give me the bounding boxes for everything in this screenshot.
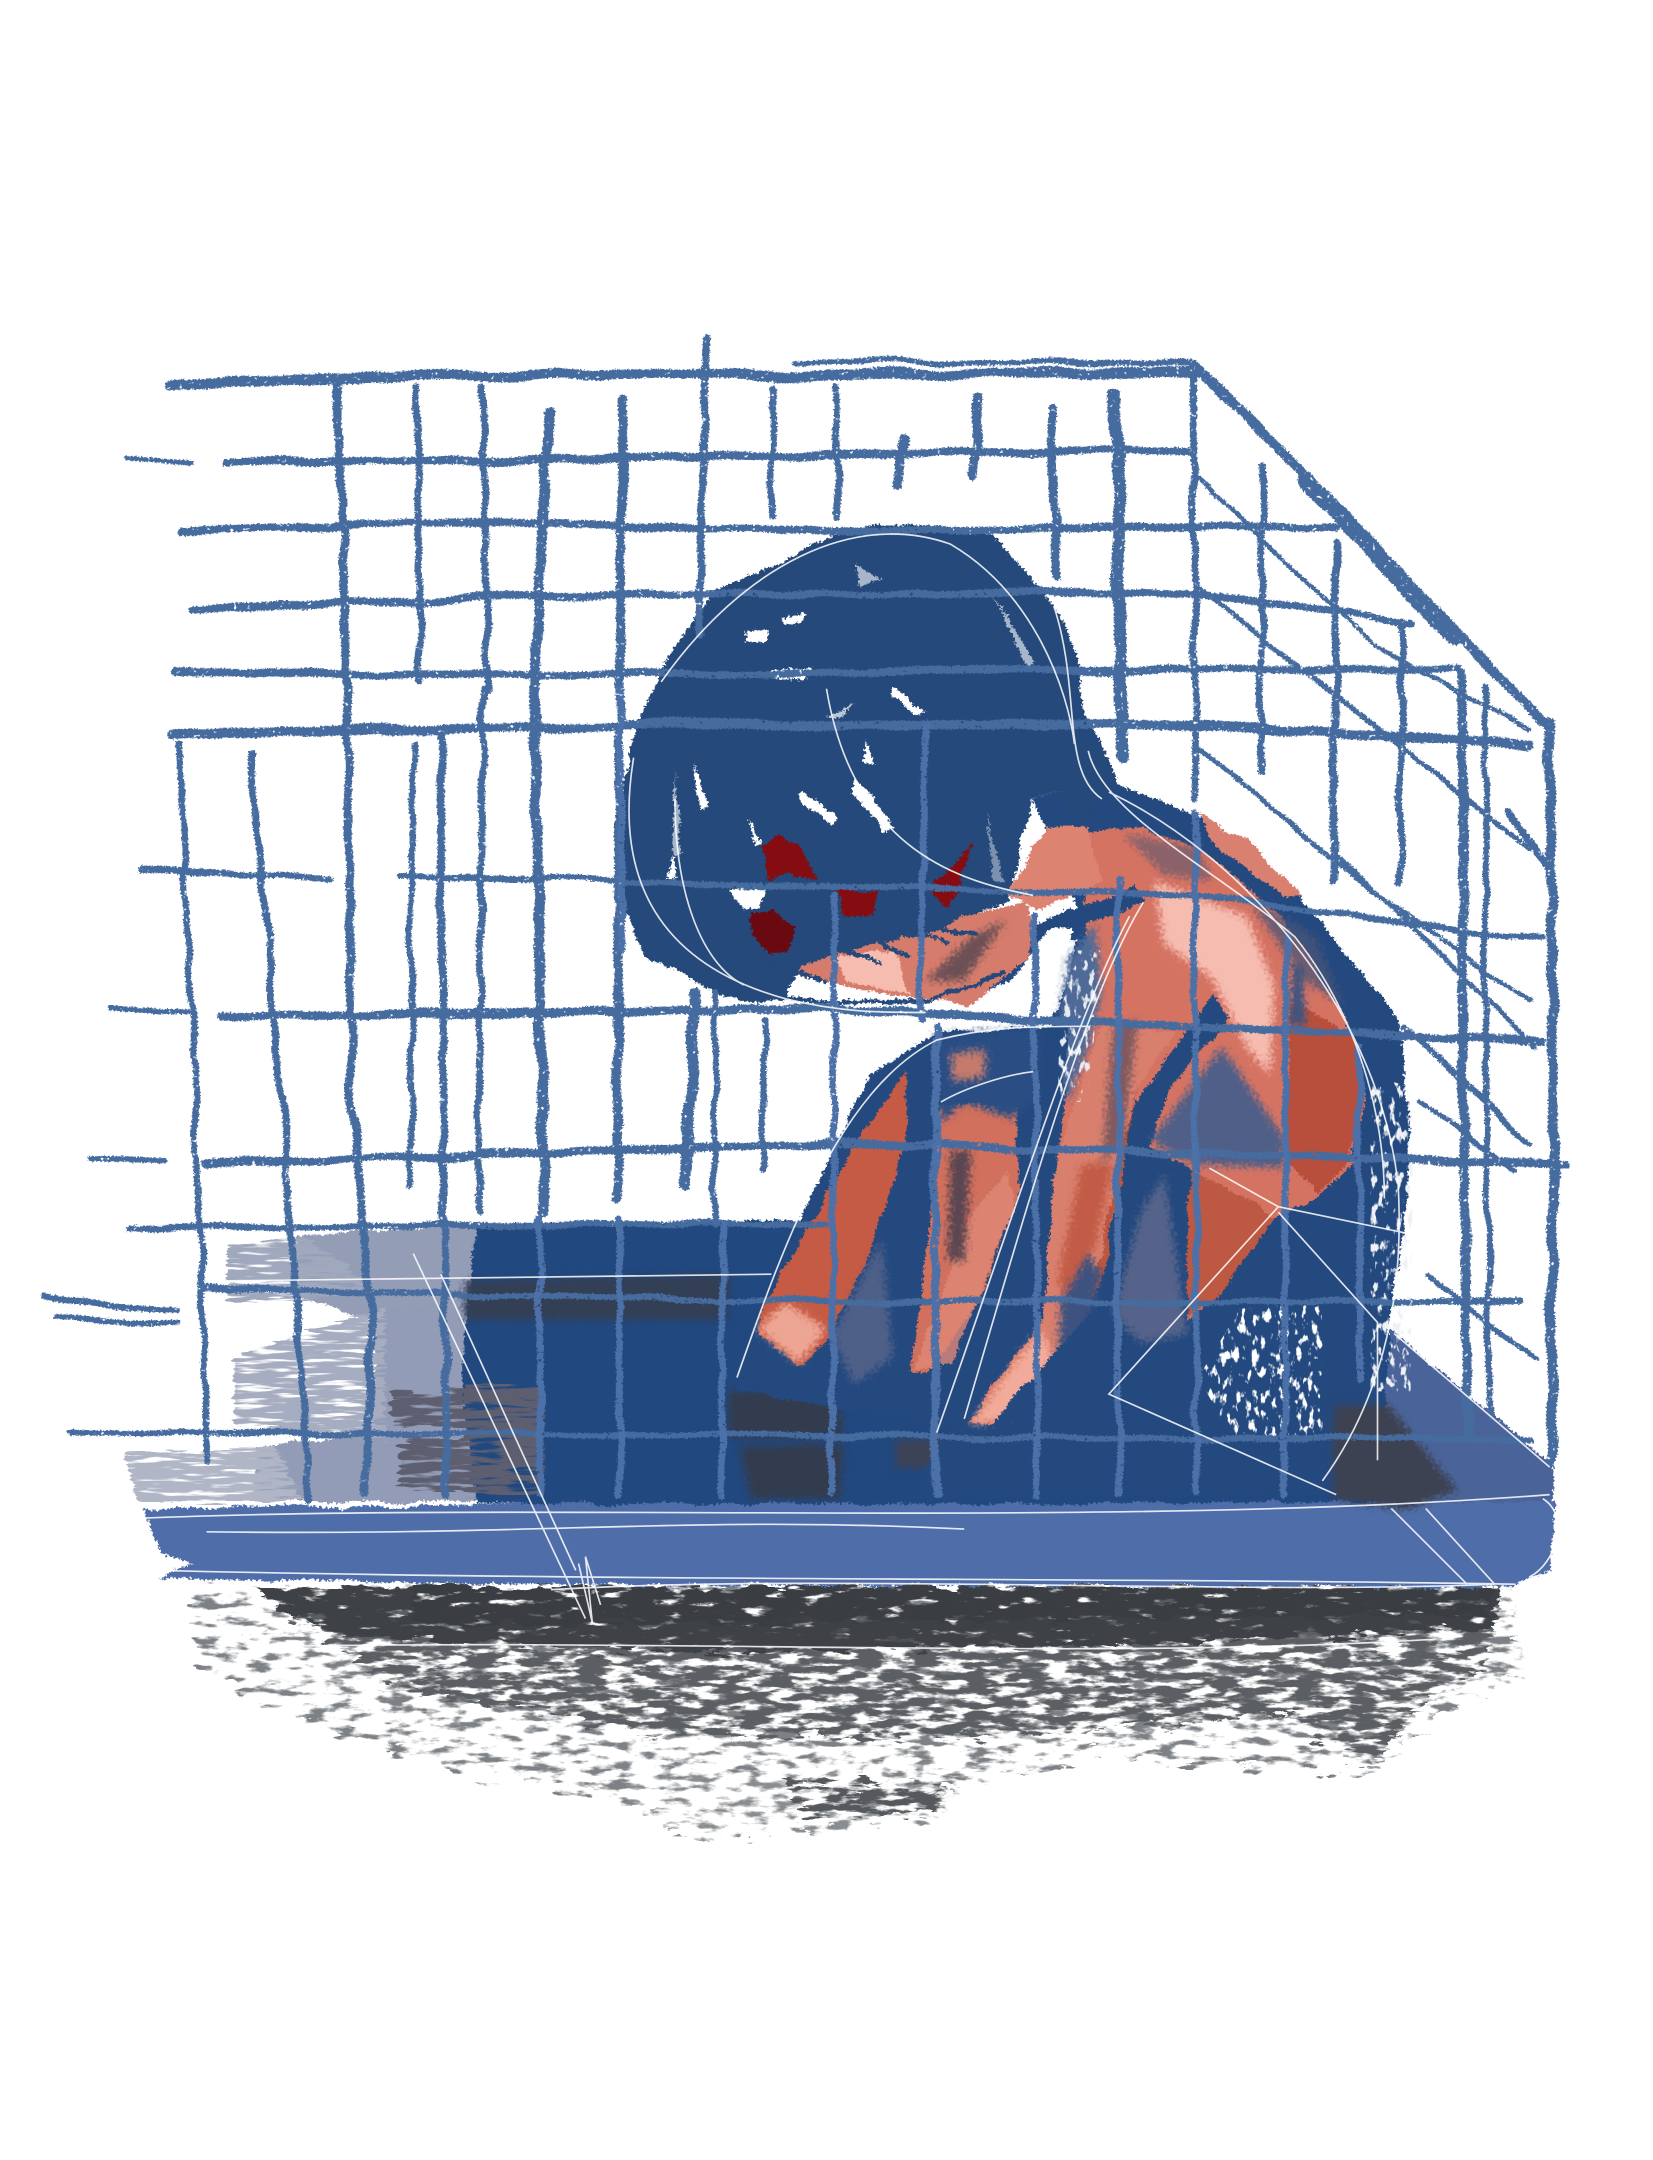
smear: dry edges bbox=[124, 1236, 386, 1502]
figure: shoulder smudges bbox=[1102, 833, 1343, 1164]
scratches on floor bbox=[145, 1254, 1558, 1649]
figure: forearm strip bbox=[967, 1028, 1176, 1424]
ground shadow: faint outer grain bbox=[193, 1584, 1529, 1839]
figure: outer skin fringe on shoulder bbox=[1198, 813, 1302, 895]
scratches on head and figure outline bbox=[629, 534, 1405, 1495]
figure: face skin bbox=[752, 902, 1036, 1006]
figure: dark base under limbs bbox=[734, 1026, 1081, 1433]
faded floor smear at left bbox=[124, 1223, 551, 1502]
smear: brown grey strokes bbox=[393, 1384, 544, 1495]
cage: vertical bars bbox=[179, 338, 1196, 1502]
cage grid bbox=[44, 338, 1563, 1502]
child figure bbox=[616, 523, 1457, 1510]
floor: lighter right wedge bbox=[1378, 1329, 1554, 1508]
cage: bars crossing the figure bbox=[540, 689, 1360, 1495]
figure: red arm shading bbox=[1068, 1000, 1361, 1329]
figure: neck skin bbox=[1006, 827, 1102, 909]
figure: light highlight on shoulder bbox=[1154, 882, 1274, 1074]
figure: raised shin, outer strip bbox=[758, 1070, 906, 1365]
cage: horizontal bars bbox=[44, 449, 1563, 1440]
figure: grey-blue triangle on torso bbox=[832, 1047, 1284, 1384]
figure: neck shadow bbox=[985, 884, 1143, 992]
figure: outer shin highlight bbox=[758, 1302, 826, 1364]
figure: hair bbox=[616, 523, 1116, 1001]
figure: face shadow bbox=[926, 920, 1006, 981]
smear: solid patches bbox=[255, 1223, 551, 1502]
figure: hair highlights bbox=[667, 565, 1033, 909]
figure: blue stroke behind arm bbox=[1055, 923, 1102, 1102]
dark grey floor patches bbox=[464, 1274, 1136, 1499]
figure: inner shin strip bbox=[912, 1105, 1021, 1372]
white scratch lines bbox=[145, 534, 1558, 1649]
floor: brown grey overlay on dark floor bbox=[464, 1384, 544, 1495]
ground shadow: dark core bbox=[248, 1584, 1501, 1653]
dark blue cage floor bbox=[461, 1221, 1394, 1508]
figure: forearm shading bbox=[971, 1164, 1113, 1424]
figure: torso skin bbox=[967, 827, 1364, 1424]
figure: dark back and lower body bbox=[909, 780, 1411, 1499]
cage: right perspective side bbox=[1196, 366, 1554, 1460]
ground shadow: mid grain bbox=[276, 1598, 1501, 1818]
figure: white gap by the neck bbox=[1036, 939, 1077, 1013]
figure: foot bbox=[1333, 1405, 1457, 1510]
cage: top frame bbox=[168, 361, 1196, 384]
figure: white scratch texture on clothing bbox=[1058, 951, 1413, 1440]
figure: hair strands over face bbox=[744, 916, 1006, 1003]
blue floor front edge bbox=[145, 1502, 1557, 1587]
figure: knee shadow bbox=[934, 1028, 1040, 1260]
figure: blood wounds bbox=[751, 836, 971, 956]
figure: dark arm bands bbox=[931, 995, 1229, 1430]
